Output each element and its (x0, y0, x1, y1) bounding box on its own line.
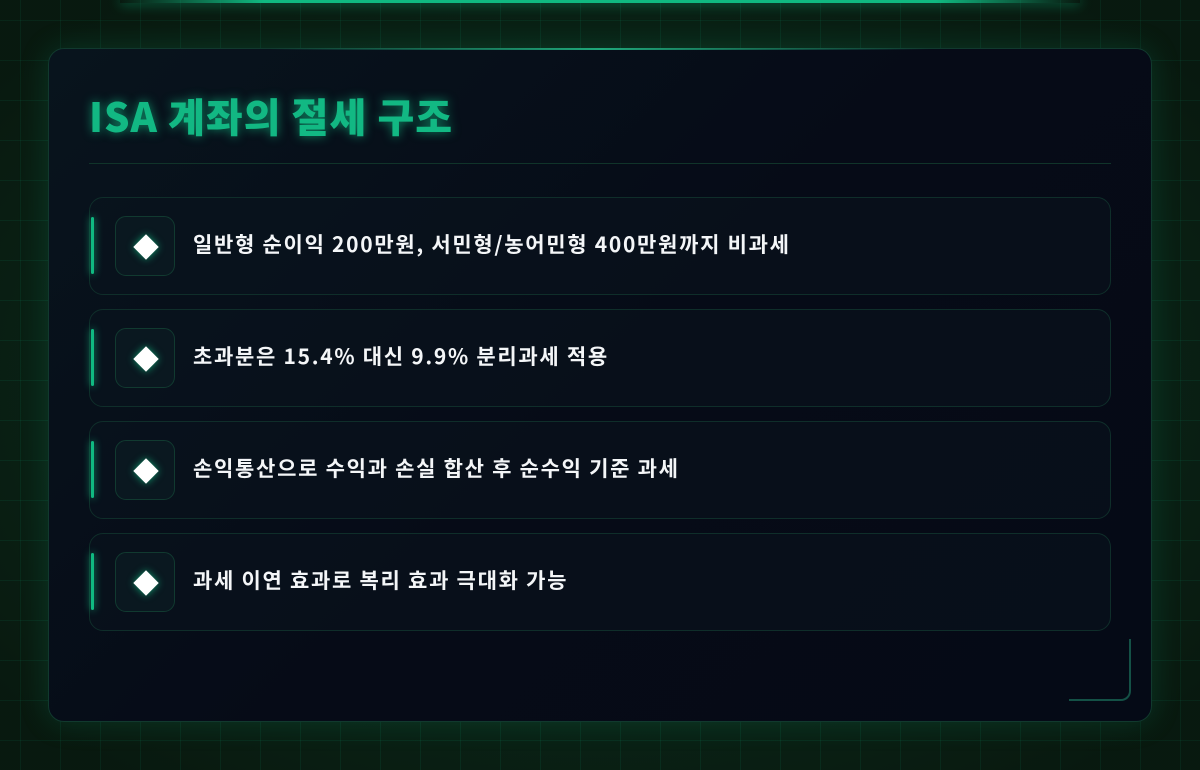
item 3 (89, 421, 1111, 519)
top glow line (120, 0, 1080, 3)
corner bracket decoration (1069, 639, 1131, 701)
item 2 (89, 309, 1111, 407)
text 1: 일반형 순이익 200만원, 서민형/농어민형 400만원까지 비과세 (193, 229, 791, 259)
icon: diamond (115, 440, 175, 500)
icon: diamond (115, 216, 175, 276)
icon: diamond (115, 552, 175, 612)
text 2: 초과분은 15.4% 대신 9.9% 분리과세 적용 (193, 341, 609, 371)
item 1 (89, 197, 1111, 295)
title: ISA 계좌의 절세 구조 (89, 86, 453, 144)
icon: diamond (115, 328, 175, 388)
item 4 (89, 533, 1111, 631)
text 3: 손익통산으로 수익과 손실 합산 후 순수익 기준 과세 (193, 453, 680, 483)
text 4: 과세 이연 효과로 복리 효과 극대화 가능 (193, 565, 568, 595)
